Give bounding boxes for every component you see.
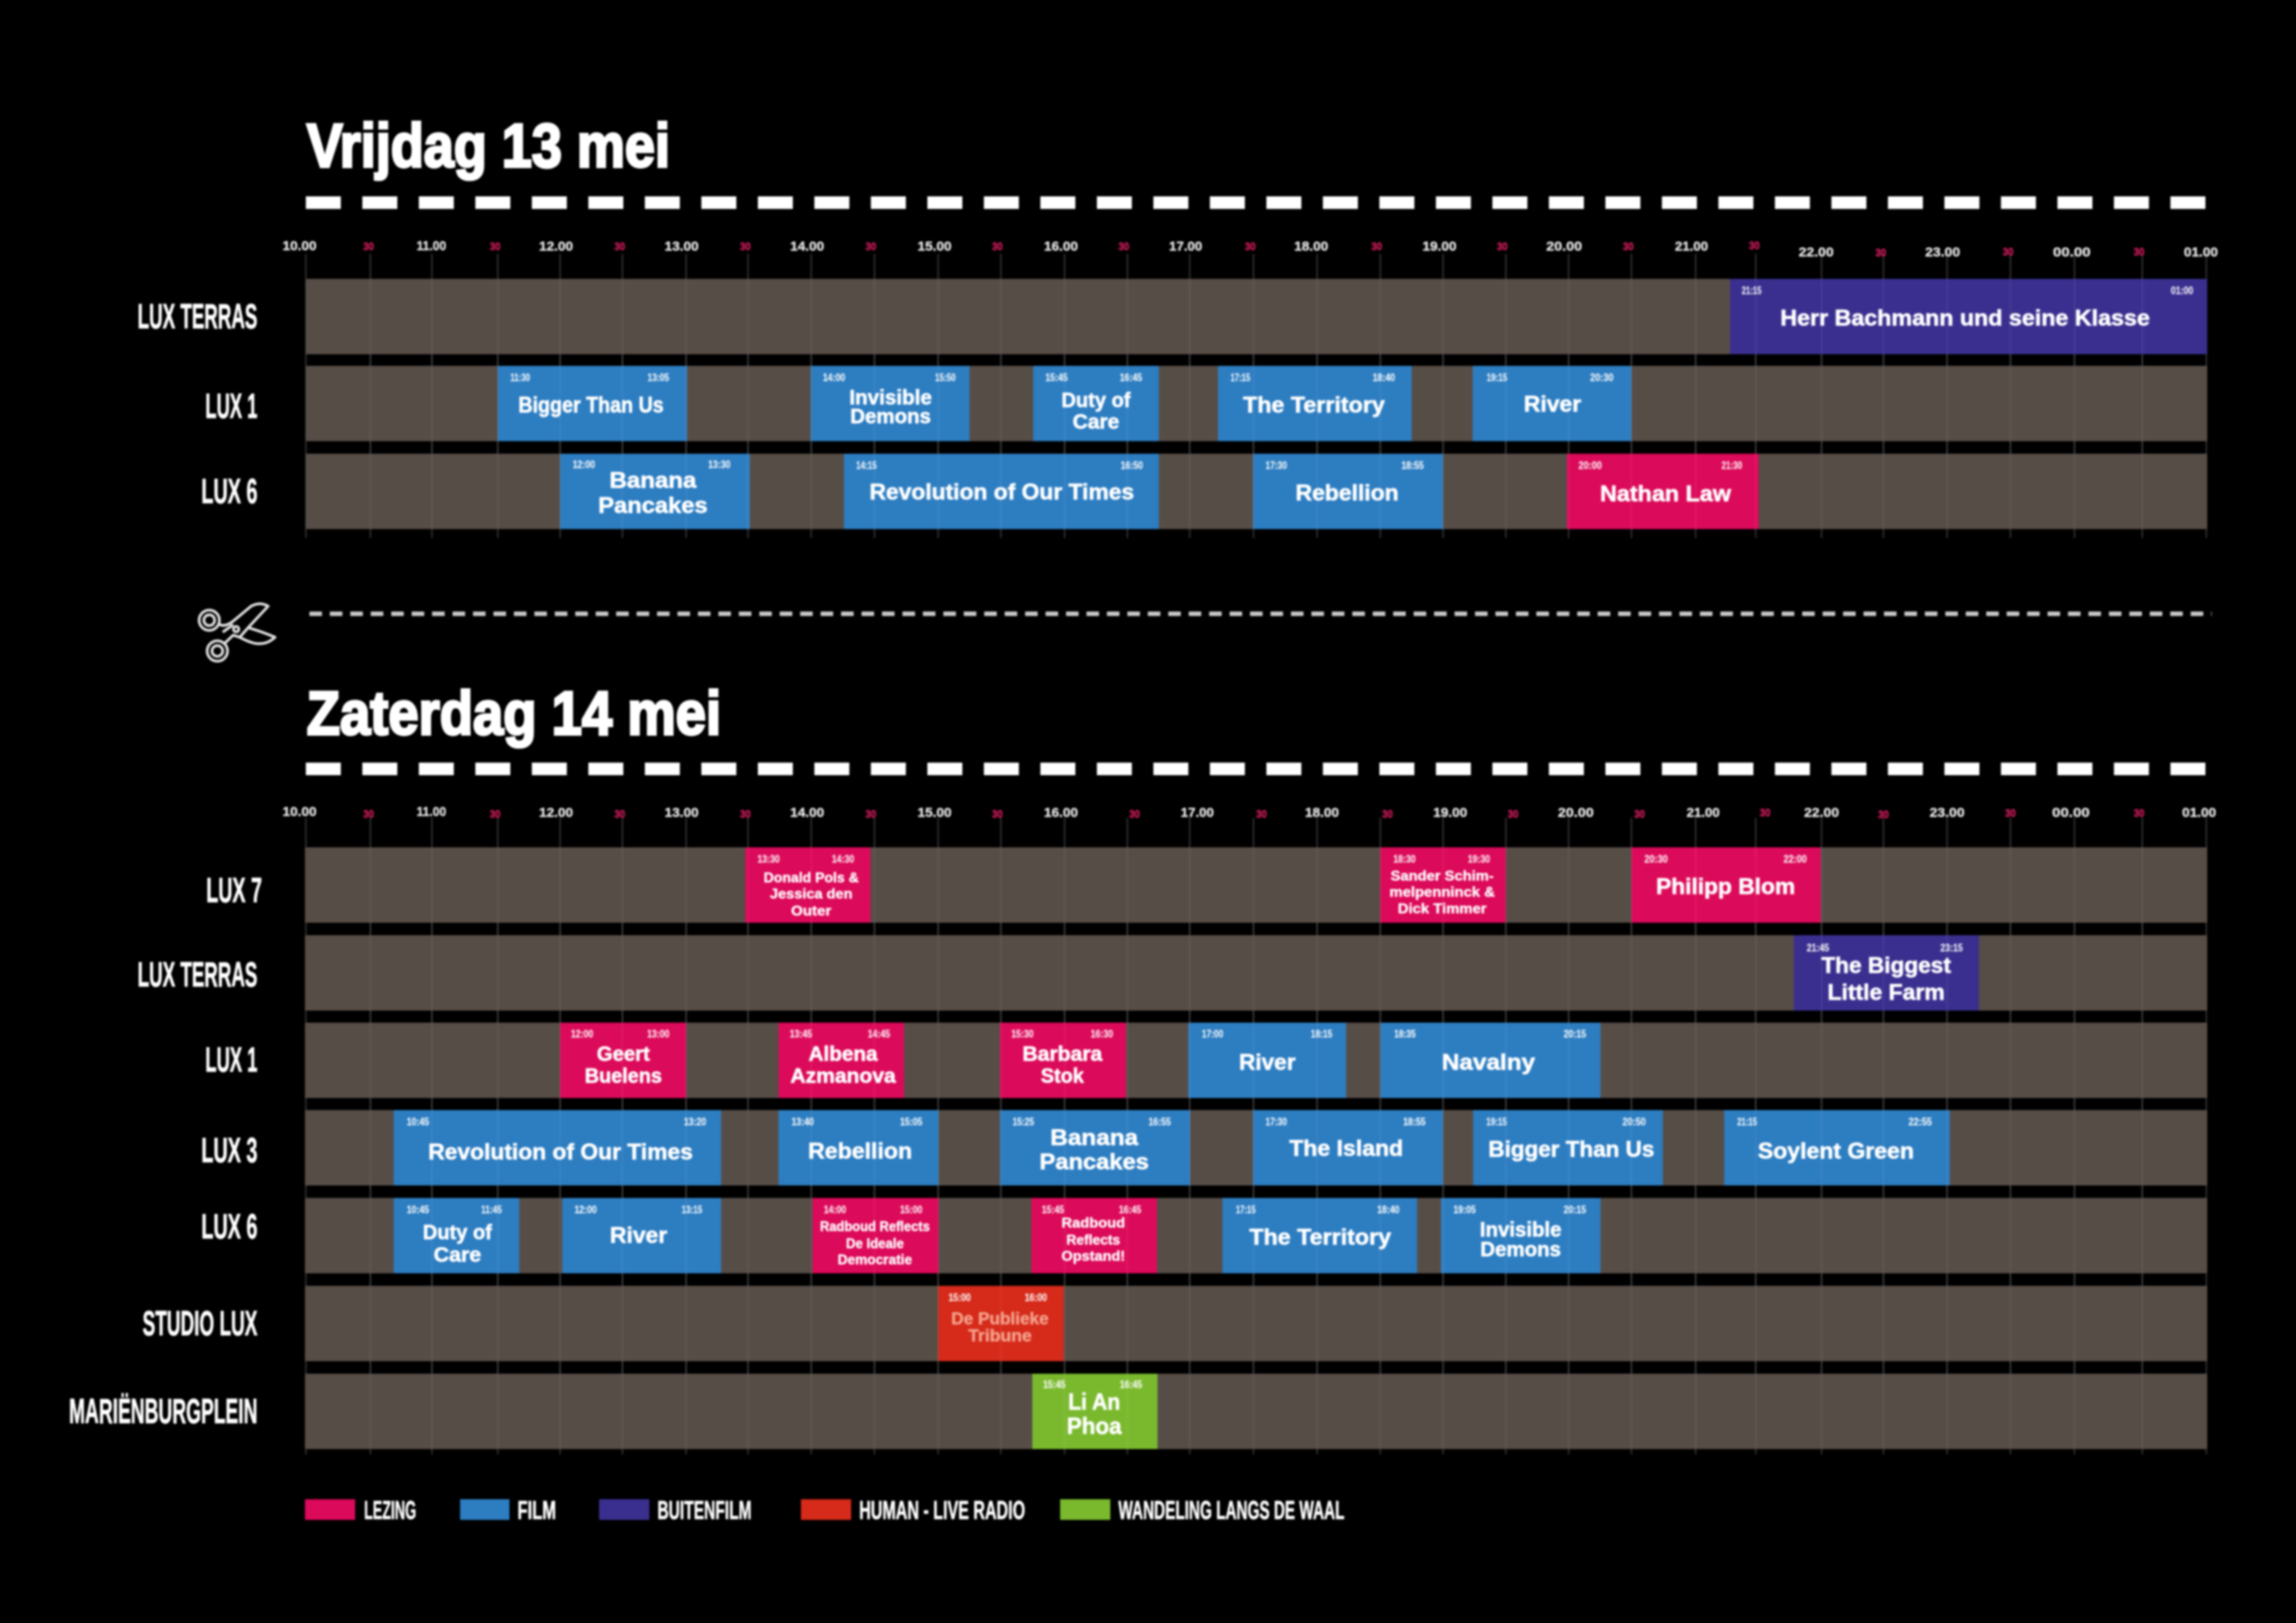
row: LUX 6 (306, 454, 2207, 529)
time axis: 00.00 (2053, 245, 2091, 260)
event: Duty of Care: 15:45 (1046, 373, 1068, 384)
time axis: 30 (363, 242, 374, 253)
event: Bigger Than Us (1473, 1110, 1663, 1185)
event: Revolution of Our Times: 14:15 (856, 461, 877, 472)
event: Barbara Stok: 15:30 (1012, 1029, 1033, 1040)
event: The Island (1253, 1110, 1443, 1185)
event: River (1473, 366, 1631, 441)
time axis: 30 (1623, 242, 1634, 253)
event: Sander Schimmelpenninck & Dick Timmer: Sander Schim- (1390, 869, 1494, 884)
heading: Vrijdag 13 mei: Vrijdag 13 mei (307, 111, 670, 180)
time axis: 30 (2134, 809, 2144, 820)
panel: zaterdag 14 mei (69, 679, 2216, 1449)
event: Radboud Reflects Opstand!: 15:45 (1042, 1205, 1065, 1216)
event: Banana Pancakes: Pancakes (598, 493, 708, 518)
event: The Territory: 17:15 (1236, 1205, 1256, 1216)
time axis: 30 (1382, 810, 1393, 820)
event: Radboud Reflects Opstand!: Reflects (1066, 1233, 1120, 1248)
time axis: 22.00 (1805, 805, 1839, 820)
time axis: 30 (1760, 809, 1770, 820)
event: Revolution of Our Times: 10:45 (407, 1117, 430, 1128)
time axis: 18.00 (1305, 805, 1339, 820)
event: Li An Phoa: Li An (1068, 1388, 1120, 1415)
event: River (1188, 1022, 1346, 1098)
time axis: 12.00 (539, 805, 573, 820)
row: LUX 6 (305, 1198, 2207, 1273)
room label: STUDIO LUX: STUDIO LUX (143, 1305, 257, 1343)
event: Sander Schimmelpenninck & Dick Timmer: melpenninck & (1389, 885, 1495, 900)
event: Banana Pancakes: Banana (1050, 1125, 1139, 1150)
event: Bigger Than Us: 13:05 (648, 373, 669, 384)
row: LUX 3 (305, 1110, 2207, 1185)
time axis: 17.00 (1170, 239, 1202, 255)
event: Albena Azmanova: 13:45 (789, 1029, 813, 1040)
event: Soylent Green: 21:15 (1737, 1117, 1757, 1128)
time axis: 30 (1497, 242, 1508, 253)
event: Invisible Demons: 14:00 (823, 373, 845, 384)
event: Radboud Reflects De Ideale Democratie: 14:00 (823, 1205, 847, 1216)
panel: vrijdag 13 mei (138, 111, 2218, 529)
event: Sander Schimmelpenninck & Dick Timmer: 19:30 (1467, 855, 1491, 865)
time axis: 30 (1634, 810, 1645, 820)
room label: LUX 1: LUX 1 (205, 1041, 257, 1080)
time axis: 19.00 (1422, 239, 1457, 255)
event: Philipp Blom: Philipp Blom (1656, 874, 1796, 899)
time axis: 18.00 (1294, 239, 1328, 255)
time axis: 20.00 (1558, 805, 1594, 820)
event: The Biggest Little Farm: The Biggest (1822, 953, 1952, 978)
event: Radboud Reflects Opstand! (1031, 1198, 1157, 1273)
event: Philipp Blom (1631, 847, 1821, 923)
event: Bigger Than Us: Bigger Than Us (518, 393, 664, 418)
event: Radboud Reflects Opstand!: Opstand! (1062, 1249, 1125, 1264)
time axis: 30 (490, 242, 500, 253)
row: LUX 1 (306, 366, 2207, 441)
row: STUDIO LUX (305, 1286, 2207, 1361)
event: River: 13:15 (682, 1205, 702, 1216)
legend item: HUMAN - LIVE RADIO: HUMAN - LIVE RADIO (859, 1497, 1025, 1525)
room label: LUX TERRAS: LUX TERRAS (138, 298, 257, 336)
cut line (309, 612, 2212, 616)
event: Revolution of Our Times (844, 454, 1159, 529)
event: Nathan Law (1567, 454, 1759, 529)
row: LUX 7 (305, 847, 2207, 923)
event: Revolution of Our Times: 13:20 (683, 1117, 707, 1128)
event: Revolution of Our Times (394, 1110, 721, 1185)
time axis: 01.00 (2184, 245, 2218, 260)
legend item: FILM: FILM (517, 1497, 556, 1525)
time axis: 30 (1118, 242, 1129, 253)
event: The Biggest Little Farm: 23:15 (1941, 943, 1963, 954)
event: Rebellion: Rebellion (1295, 481, 1399, 506)
event: Donald Pols & Jessica den Outer: Jessica den (770, 887, 852, 902)
event: Navalny: 20:15 (1564, 1029, 1587, 1040)
time axis: 30 (363, 810, 374, 820)
event: Radboud Reflects De Ideale Democratie (813, 1198, 938, 1273)
time axis: 30 (2005, 809, 2016, 820)
event: Sander Schimmelpenninck & Dick Timmer: Dick Timmer (1397, 902, 1487, 916)
event: Albena Azmanova: Albena (809, 1042, 878, 1065)
time axis: 30 (614, 242, 625, 253)
event: Banana Pancakes: Pancakes (1039, 1150, 1149, 1175)
event: Navalny: 18:35 (1394, 1029, 1416, 1040)
event: Barbara Stok (1000, 1022, 1126, 1098)
event: River: 17:00 (1202, 1029, 1223, 1040)
icon: scissors (199, 603, 275, 661)
event: Duty of Care: Duty of (423, 1220, 492, 1244)
event: Invisible Demons (1440, 1198, 1600, 1273)
row: LUX TERRAS (305, 935, 2207, 1011)
event: Bigger Than Us: 20:50 (1622, 1117, 1646, 1128)
event: Duty of Care: 10:45 (407, 1205, 430, 1216)
event: Geert Buelens: Geert (597, 1042, 650, 1065)
row: LUX 1 (305, 1022, 2207, 1098)
event: Herr Bachmann und seine Klasse: 01:00 (2170, 286, 2194, 297)
event: Rebellion: 15:05 (900, 1117, 923, 1128)
event: Revolution of Our Times: Revolution of Our Times (429, 1140, 692, 1165)
event: Nathan Law: Nathan Law (1600, 482, 1732, 507)
event: Banana Pancakes: 15:25 (1013, 1117, 1034, 1128)
event: Banana Pancakes: 13:30 (709, 460, 730, 471)
event: Albena Azmanova (778, 1022, 904, 1098)
time axis: 30 (865, 810, 876, 820)
event: The Biggest Little Farm: Little Farm (1828, 980, 1944, 1005)
time axis: 11.00 (416, 239, 447, 254)
event: Soylent Green: Soylent Green (1758, 1139, 1914, 1164)
event: Invisible Demons: Demons (1480, 1237, 1561, 1261)
event: Donald Pols & Jessica den Outer (745, 847, 871, 923)
time axis: 22.00 (1799, 245, 1833, 260)
event: Duty of Care (394, 1198, 519, 1273)
event: Philipp Blom: 22:00 (1784, 855, 1807, 865)
event: The Territory (1222, 1198, 1417, 1273)
event: Sander Schimmelpenninck & Dick Timmer (1380, 847, 1506, 923)
row: MARIËNBURGPLEIN (305, 1374, 2207, 1449)
time axis: 30 (1749, 241, 1760, 252)
event: The Territory (1218, 366, 1412, 441)
event: The Island: 18:55 (1403, 1117, 1426, 1128)
event: The Island: 17:30 (1265, 1117, 1287, 1128)
event: Duty of Care (1033, 366, 1159, 441)
event: River: 19:15 (1487, 373, 1508, 384)
event: Duty of Care: Care (434, 1243, 481, 1266)
room label: LUX 3: LUX 3 (201, 1132, 257, 1170)
event: Invisible Demons: Demons (850, 404, 931, 428)
event: Radboud Reflects Opstand!: Radboud (1062, 1216, 1125, 1231)
time axis: 13.00 (665, 805, 699, 820)
event: Bigger Than Us (498, 366, 687, 441)
event: The Territory: 17:15 (1231, 373, 1250, 384)
event: River: River (1239, 1050, 1296, 1075)
event: Revolution of Our Times: Revolution of Our Times (870, 480, 1134, 505)
event: Philipp Blom: 20:30 (1645, 855, 1668, 865)
event: River: 18:15 (1311, 1029, 1333, 1040)
event: River: 12:00 (574, 1205, 597, 1216)
event: Duty of Care: Duty of (1062, 388, 1131, 412)
time axis: 30 (865, 242, 876, 253)
event: De Publieke Tribune: 16:00 (1024, 1293, 1048, 1304)
grid lines vrijdag, over rows (370, 279, 2143, 529)
time axis: 13.00 (665, 239, 699, 255)
event: Rebellion: Rebellion (808, 1139, 912, 1164)
time axis (283, 804, 2216, 821)
time axis: 30 (1878, 811, 1889, 821)
event: Banana Pancakes (560, 454, 750, 529)
event: The Territory: The Territory (1249, 1225, 1391, 1250)
event: Rebellion (1253, 454, 1443, 529)
time axis: 30 (2134, 247, 2144, 258)
legend item: BUITENFILM (599, 1497, 752, 1525)
event: The Biggest Little Farm (1794, 935, 1979, 1011)
time axis (283, 239, 2218, 260)
time axis: 30 (490, 810, 500, 820)
event: Barbara Stok: 16:30 (1091, 1029, 1113, 1040)
event: Rebellion (778, 1110, 938, 1185)
event: Geert Buelens: 12:00 (570, 1029, 594, 1040)
time axis: 15.00 (918, 805, 952, 820)
event: Soylent Green: 22:55 (1909, 1117, 1933, 1128)
time axis: 30 (2003, 247, 2013, 258)
event: Sander Schimmelpenninck & Dick Timmer: 18:30 (1394, 855, 1415, 865)
grid lines vrijdag, on black (306, 254, 2206, 538)
time axis: 16.00 (1044, 805, 1078, 820)
legend item: LEZING (305, 1497, 416, 1525)
event: Duty of Care: 16:45 (1119, 373, 1143, 384)
time axis: 30 (1256, 810, 1266, 820)
legend item: LEZING: LEZING (364, 1497, 416, 1525)
event: Invisible Demons: 15:50 (935, 373, 956, 384)
event: The Territory: The Territory (1243, 393, 1385, 418)
legend item: BUITENFILM: BUITENFILM (657, 1497, 752, 1525)
thick dashed rule (306, 762, 2207, 775)
event: Herr Bachmann und seine Klasse: Herr Bachmann und seine Klasse (1780, 306, 2150, 331)
event: Radboud Reflects De Ideale Democratie: De Ideale (846, 1237, 904, 1252)
time axis: 00.00 (2052, 805, 2090, 820)
time axis: 30 (1371, 242, 1382, 253)
grid lines zaterdag, over rows (370, 847, 2143, 1449)
time axis: 11.00 (416, 804, 447, 820)
event: Radboud Reflects Opstand!: 16:45 (1119, 1205, 1142, 1216)
time axis: 30 (1129, 810, 1140, 820)
event: Banana Pancakes: 12:00 (572, 460, 596, 471)
event: River: 20:30 (1590, 373, 1613, 384)
time axis: 10.00 (283, 804, 317, 820)
event: Geert Buelens (560, 1022, 686, 1098)
time axis: 17.00 (1180, 805, 1214, 820)
legend item: WANDELING LANGS DE WAAL (1060, 1497, 1344, 1525)
event: Banana Pancakes: Banana (610, 468, 698, 493)
time axis: 30 (614, 810, 625, 820)
time axis: 14.00 (790, 239, 824, 255)
event: Donald Pols & Jessica den Outer: 13:30 (757, 855, 780, 865)
event: Invisible Demons: Invisible (1480, 1218, 1561, 1241)
thick dashed rule (306, 196, 2207, 209)
event: Nathan Law: 20:00 (1578, 461, 1602, 472)
event: Radboud Reflects De Ideale Democratie: Democratie (838, 1253, 912, 1268)
time axis: 30 (992, 810, 1003, 820)
time axis: 21.00 (1686, 805, 1720, 820)
room label: LUX 6: LUX 6 (201, 473, 257, 511)
event: Donald Pols & Jessica den Outer: Outer (791, 904, 831, 919)
event: Li An Phoa: Phoa (1067, 1412, 1122, 1439)
event: Banana Pancakes: 16:55 (1148, 1117, 1171, 1128)
event: Invisible Demons (811, 366, 970, 441)
legend item: HUMAN - LIVE RADIO (801, 1497, 1025, 1525)
event: Soylent Green (1724, 1110, 1950, 1185)
grid lines zaterdag, on black (306, 818, 2206, 1454)
room label: LUX 7: LUX 7 (206, 872, 262, 910)
event: Rebellion: 17:30 (1265, 461, 1287, 472)
event: Geert Buelens: Buelens (585, 1063, 662, 1087)
room label: LUX 1: LUX 1 (205, 387, 257, 426)
event: Albena Azmanova: Azmanova (790, 1063, 896, 1087)
event: Navalny (1380, 1022, 1600, 1098)
time axis: 16.00 (1044, 239, 1078, 255)
time axis: 23.00 (1925, 245, 1961, 260)
time axis: 19.00 (1433, 805, 1467, 820)
event: Duty of Care: Care (1073, 410, 1119, 433)
time axis: 15.00 (918, 239, 952, 255)
event: River: River (1524, 392, 1581, 417)
event: De Publieke Tribune: Tribune (969, 1327, 1031, 1346)
time axis: 12.00 (539, 239, 573, 255)
event: The Territory: 18:40 (1378, 1205, 1399, 1216)
time axis: 30 (1245, 242, 1256, 253)
event: Rebellion: 13:40 (791, 1117, 814, 1128)
time axis: 30 (740, 242, 751, 253)
room label: LUX 6: LUX 6 (201, 1208, 257, 1246)
event: River: River (610, 1223, 667, 1248)
legend item: FILM (460, 1497, 556, 1525)
event: De Publieke Tribune: 15:00 (949, 1293, 970, 1304)
event: Rebellion: 18:55 (1401, 461, 1424, 472)
event: Navalny: Navalny (1442, 1050, 1535, 1075)
event: Radboud Reflects De Ideale Democratie: Radboud Reflects (820, 1219, 930, 1235)
event: Li An Phoa (1032, 1374, 1158, 1449)
event: Bigger Than Us: 11:30 (510, 373, 530, 384)
time axis: 30 (1508, 810, 1518, 820)
event: Revolution of Our Times: 16:50 (1121, 461, 1143, 472)
event: Albena Azmanova: 14:45 (868, 1029, 891, 1040)
time axis: 14.00 (790, 805, 824, 820)
event: Geert Buelens: 13:00 (648, 1029, 669, 1040)
event: Invisible Demons: Invisible (849, 386, 932, 409)
event: The Biggest Little Farm: 21:45 (1806, 943, 1830, 954)
heading: Zaterdag 14 mei: Zaterdag 14 mei (307, 679, 721, 748)
event: River (562, 1198, 721, 1273)
event: Invisible Demons: 20:15 (1564, 1205, 1587, 1216)
time axis: 20.00 (1546, 239, 1582, 255)
event: De Publieke Tribune: De Publieke (952, 1310, 1048, 1329)
time axis: 30 (740, 810, 751, 820)
row: LUX TERRAS (306, 279, 2207, 354)
event: Invisible Demons: 19:05 (1453, 1205, 1476, 1216)
event: Donald Pols & Jessica den Outer: 14:30 (832, 855, 854, 865)
room label: MARIËNBURGPLEIN: MARIËNBURGPLEIN (69, 1393, 257, 1431)
event: Banana Pancakes (1000, 1110, 1190, 1185)
room label: LUX TERRAS: LUX TERRAS (138, 956, 257, 994)
event: Duty of Care: 11:45 (481, 1205, 502, 1216)
time axis: 30 (992, 242, 1003, 253)
event: Bigger Than Us: Bigger Than Us (1489, 1137, 1654, 1162)
legend (305, 1497, 1344, 1525)
event: Barbara Stok: Stok (1040, 1063, 1084, 1087)
time axis: 30 (1875, 248, 1886, 259)
event: The Territory: 18:40 (1372, 373, 1396, 384)
event: The Island: The Island (1290, 1136, 1403, 1161)
time axis: 23.00 (1930, 805, 1964, 820)
time axis: 01.00 (2182, 805, 2216, 820)
event: Li An Phoa: 16:45 (1119, 1380, 1143, 1391)
event: Bigger Than Us: 19:15 (1486, 1117, 1508, 1128)
time axis: 10.00 (283, 239, 317, 254)
event: De Publieke Tribune (938, 1286, 1064, 1361)
event: Herr Bachmann und seine Klasse (1730, 279, 2207, 354)
event: Barbara Stok: Barbara (1022, 1042, 1102, 1065)
event: Nathan Law: 21:30 (1722, 461, 1742, 472)
event: Donald Pols & Jessica den Outer: Donald Pols & (764, 871, 859, 886)
legend item: WANDELING LANGS DE WAAL: WANDELING LANGS DE WAAL (1118, 1497, 1344, 1525)
time axis: 21.00 (1675, 239, 1708, 255)
event: Radboud Reflects De Ideale Democratie: 15:00 (900, 1205, 922, 1216)
event: Li An Phoa: 15:45 (1043, 1380, 1066, 1391)
event: Herr Bachmann und seine Klasse: 21:15 (1742, 286, 1761, 297)
